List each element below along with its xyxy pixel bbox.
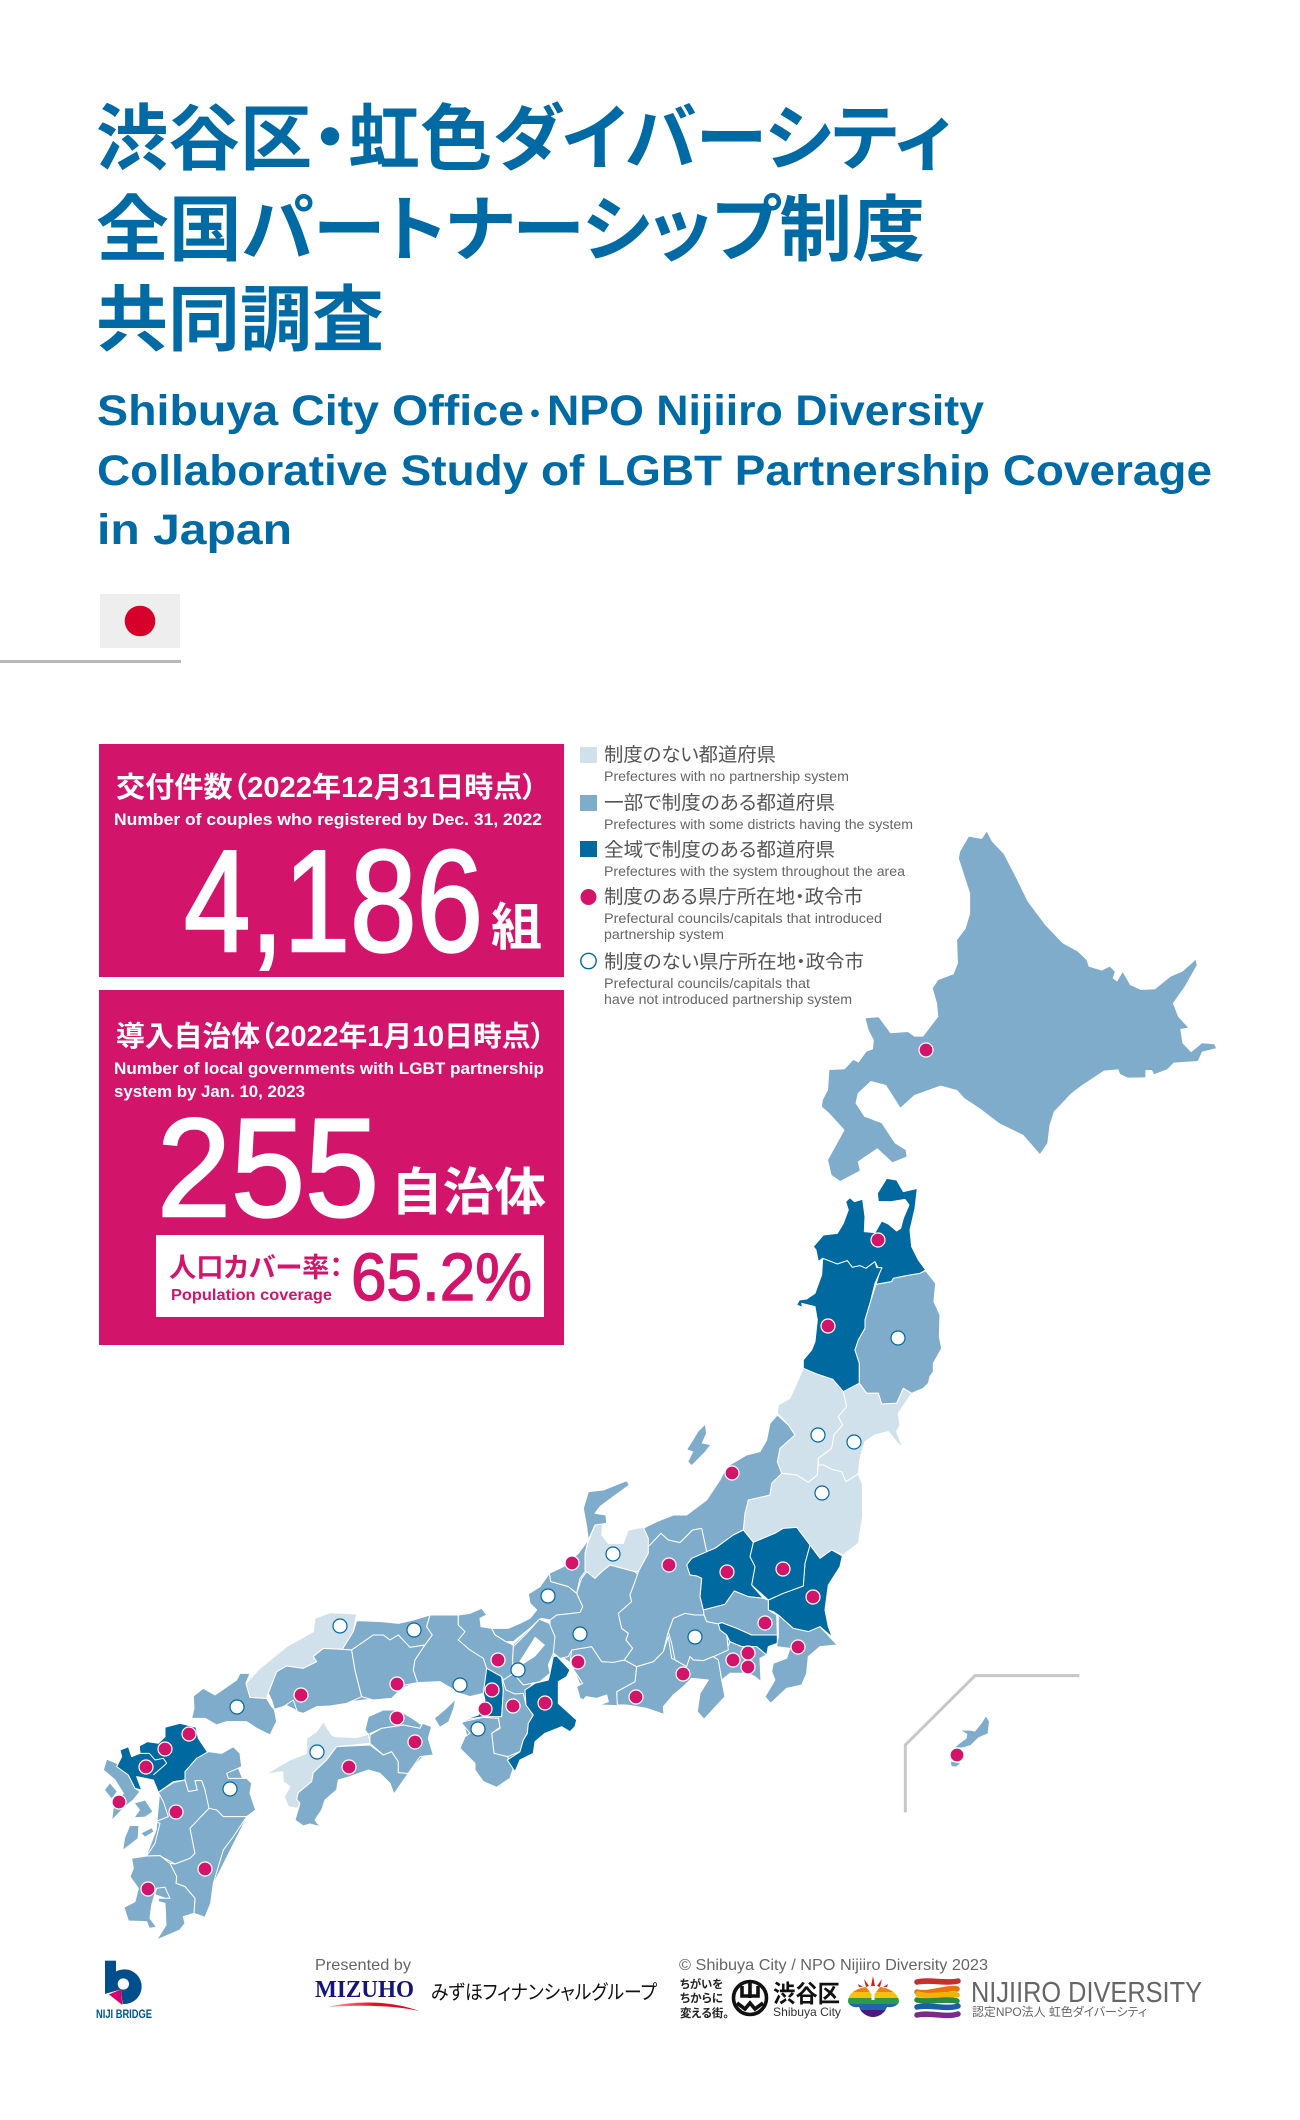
legend item: whole area: 全域で制度のある都道府県: [604, 839, 835, 861]
logo: shibuya city: 変える街。: [680, 2006, 729, 2020]
legend item: no system: Prefectures with no partnership system: [604, 769, 849, 784]
map: sado island: [687, 1425, 710, 1465]
sponsor: mizuho: みずほフィナンシャルグループ: [431, 1981, 657, 2004]
english subtitle: NPO Nijiiro Diversity: [547, 387, 984, 435]
legend item: capitals with system: 制度のある県庁所在地・政令市: [604, 886, 863, 908]
panel: local governments: 導入自治体（2022年1月10日時点）: [116, 1021, 545, 1053]
logo: nijiiro diversity: [917, 1977, 1202, 2019]
panel: local governments: 65.2%: [351, 1240, 532, 1315]
map markers: capitals with system: [112, 1043, 964, 1896]
title: 全国パートナーシップ制度: [96, 191, 925, 271]
english subtitle: ・: [528, 399, 542, 432]
legend item: capitals without system: [581, 951, 864, 1007]
map: okinawa inset: [905, 1676, 1079, 1812]
title: [96, 100, 952, 361]
legend item: capitals without system: have not introduced partnership system: [604, 992, 852, 1007]
logo: nijiiro diversity: 認定NPO法人 虹色ダイバーシティ: [972, 2004, 1147, 2019]
english subtitle: Collaborative Study of LGBT Partnership Coverage: [97, 447, 1212, 495]
panel: registered couples: Number of couples who registered by Dec. 31, 2022: [114, 810, 542, 829]
legend item: capitals with system: Prefectural councils/capitals that introduced: [604, 911, 882, 926]
legend item: some districts: [580, 792, 913, 832]
english subtitle: in Japan: [97, 506, 292, 554]
legend: [580, 744, 913, 1007]
map: chubu and kanto: [492, 1415, 863, 1719]
legend item: some districts: Prefectures with some districts having the system: [604, 817, 913, 832]
panel: local governments: system by Jan. 10, 2023: [114, 1082, 305, 1101]
legend item: capitals without system: 制度のない県庁所在地・政令市: [604, 951, 864, 973]
map: kyushu: [103, 1723, 256, 1940]
panel: local governments: Population coverage: [171, 1287, 332, 1304]
sponsor: mizuho: Presented by: [315, 1957, 411, 1974]
map: shikoku: [266, 1710, 433, 1827]
sponsor: mizuho: MIZUHO: [315, 1977, 414, 2003]
logo: niji bridge: NIJI BRIDGE: [96, 2009, 152, 2021]
legend item: capitals without system: Prefectural councils/capitals that: [604, 976, 810, 991]
legend item: capitals with system: [580, 886, 882, 942]
legend item: whole area: Prefectures with the system throughout the area: [604, 864, 906, 879]
title: 共同調査: [96, 281, 384, 361]
map: chugoku: [192, 1613, 487, 1735]
icon: rainbow flower: [848, 1976, 899, 2017]
logo: shibuya city: 渋谷区: [773, 1981, 840, 2008]
panel: local governments: [99, 990, 564, 1345]
panel: local governments: 自治体: [391, 1164, 546, 1221]
map markers: capitals without system: [223, 1331, 905, 1796]
map: japan: [103, 832, 1216, 1940]
logo: nijiiro diversity: NIJIIRO DIVERSITY: [971, 1977, 1202, 2009]
panel: registered couples: 4,186: [184, 820, 483, 982]
english subtitle: Shibuya City Office: [97, 387, 524, 435]
icon: japan flag: [0, 594, 181, 663]
icon: rainbow stripes: [917, 1981, 958, 2015]
map: kinki: [458, 1608, 577, 1787]
logo: shibuya city: ちからに: [680, 1992, 723, 2005]
map: hokkaido: [822, 832, 1216, 1181]
panel: local governments: 255: [157, 1089, 379, 1246]
legend item: some districts: 一部で制度のある都道府県: [604, 792, 835, 814]
legend item: no system: 制度のない都道府県: [604, 744, 776, 766]
legend item: whole area: [580, 839, 906, 879]
panel: registered couples: 組: [491, 899, 542, 956]
copyright: © Shibuya City / NPO Nijiiro Diversity 2023: [679, 1957, 988, 1974]
english subtitle: [97, 387, 1212, 554]
logo: niji bridge: [96, 1961, 152, 2021]
map: tohoku: [777, 1178, 942, 1482]
logo: shibuya city: ちがいを: [680, 1977, 723, 1991]
logo: shibuya city: Shibuya City: [773, 2005, 841, 2019]
legend item: capitals with system: partnership system: [604, 927, 724, 942]
panel: local governments: Number of local governments with LGBT partnership: [114, 1059, 544, 1078]
logo: shibuya city: [680, 1977, 841, 2020]
title: 渋谷区・虹色ダイバーシティ: [96, 100, 952, 180]
panel: registered couples: 交付件数（2022年12月31日時点）: [116, 772, 537, 804]
sponsor: mizuho: [315, 1957, 657, 2011]
legend item: no system: [580, 744, 849, 784]
icon: shibuya emblem: [734, 1982, 766, 2014]
panel: local governments: 人口カバー率：: [169, 1253, 343, 1283]
panel: registered couples: [99, 744, 564, 982]
